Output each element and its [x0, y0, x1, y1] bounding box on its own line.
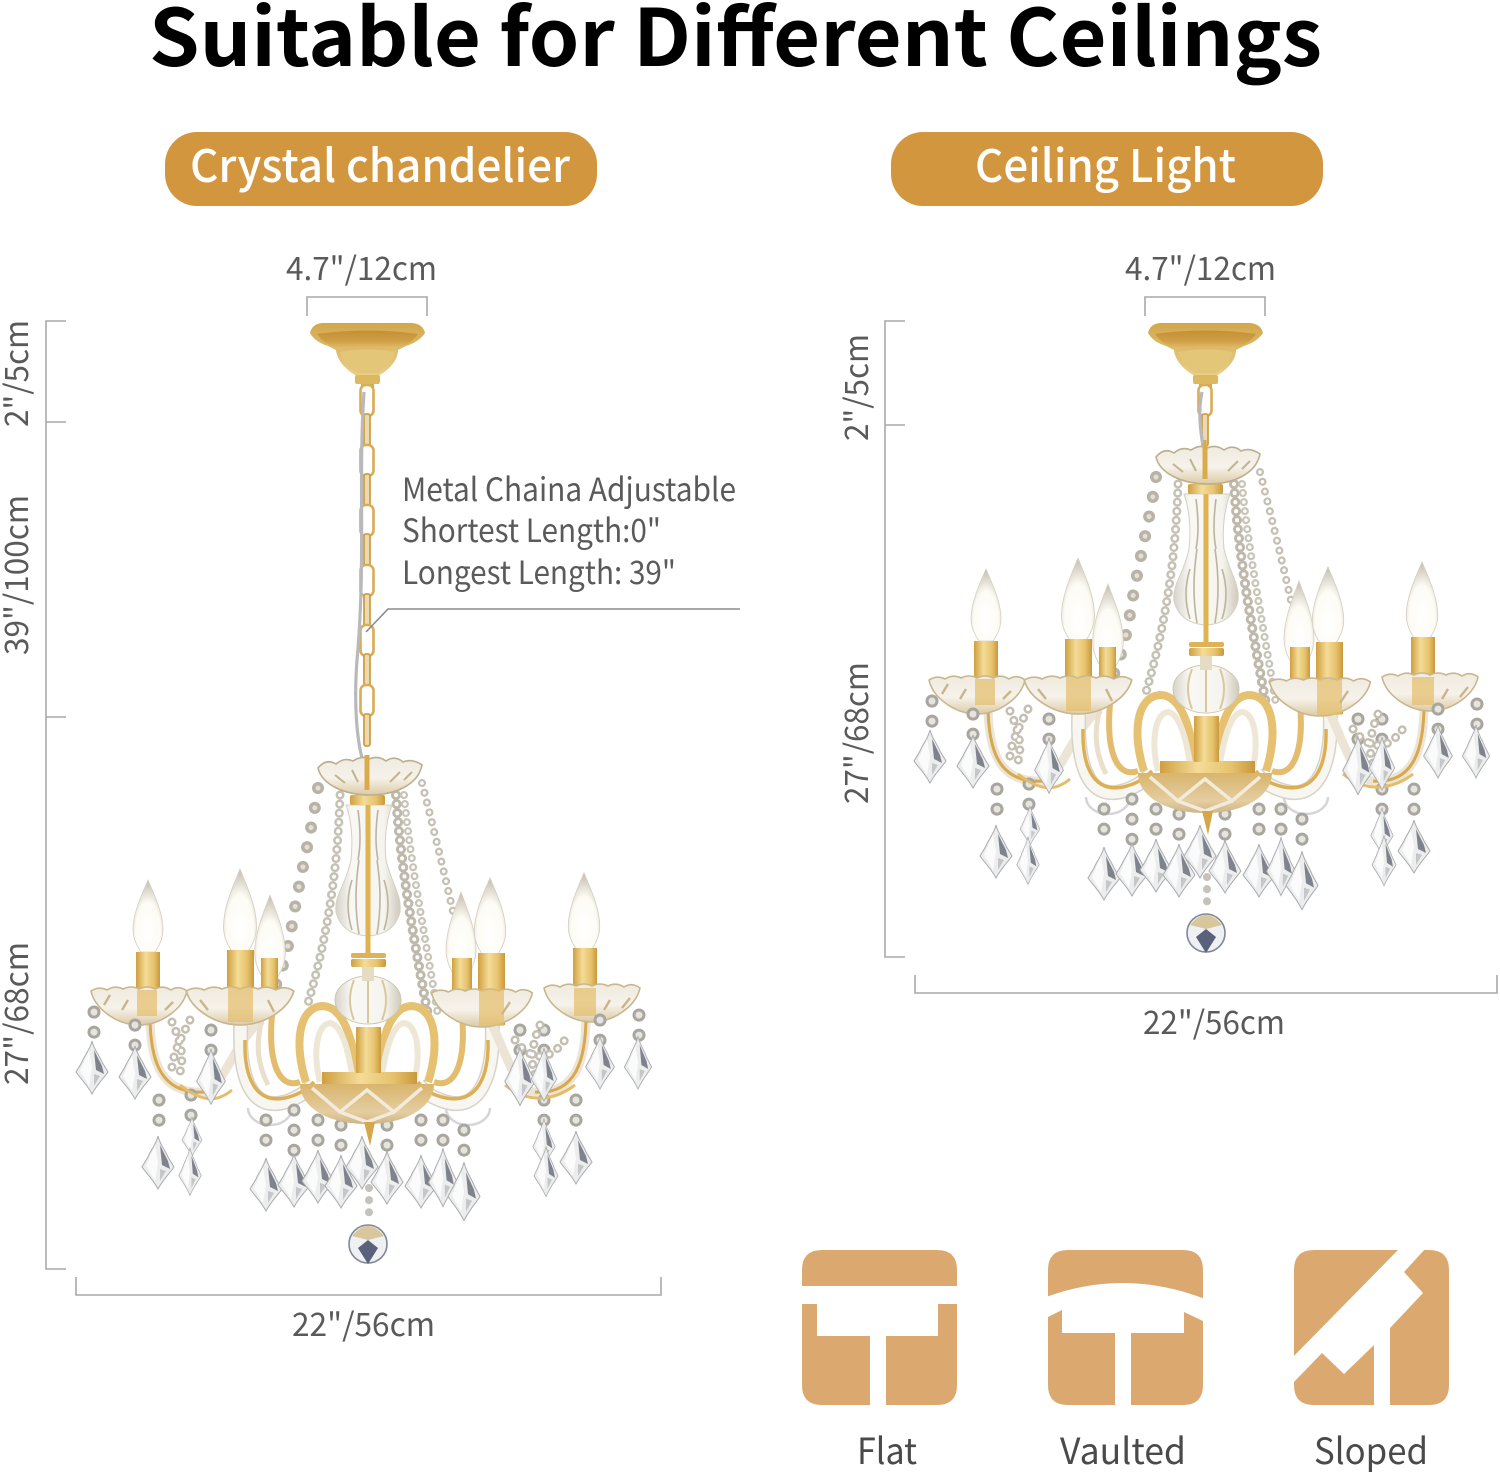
chandelier body [914, 444, 1490, 953]
icon: ceiling canopy [310, 323, 425, 392]
panel: crystal chandelier heading pill: Crystal chandelier [190, 130, 571, 195]
icon: flat ceiling [800, 1250, 959, 1407]
callout: chain length text: Shortest Length:0" [402, 506, 661, 552]
label: Flat: Flat [857, 1423, 917, 1475]
canopy width bracket [307, 297, 427, 316]
chandelier body [76, 755, 652, 1264]
width bracket [915, 975, 1497, 993]
width label: 22"/56cm [292, 1300, 435, 1346]
callout: chain length text: Longest Length: 39" [402, 548, 676, 594]
chain with wire [356, 385, 374, 765]
callout: chain length text: Metal Chaina Adjustable [402, 465, 736, 511]
callout leader line [366, 609, 740, 632]
callout: chain length text [402, 465, 736, 594]
label: Sloped: Sloped [1314, 1423, 1428, 1475]
vertical dimension axis [46, 321, 66, 1269]
label: Vaulted: Vaulted [1060, 1423, 1186, 1475]
height label: canopy: 2"/5cm [832, 334, 878, 441]
canopy width label: 4.7"/12cm [1125, 244, 1276, 290]
panel: crystal chandelier dimension diagram [0, 244, 740, 1346]
canopy width bracket [1145, 297, 1265, 316]
width bracket [76, 1277, 661, 1295]
width label: 22"/56cm [1143, 998, 1285, 1044]
icon: ceiling canopy [1148, 323, 1263, 392]
short chain [1198, 385, 1212, 455]
icon: sloped ceiling [1292, 1248, 1449, 1407]
canopy width label: 4.7"/12cm [286, 244, 437, 290]
vertical dimension axis [885, 321, 905, 957]
panel: ceiling light dimension diagram [832, 244, 1497, 1044]
panel: ceiling light heading pill [891, 130, 1323, 206]
icon: vaulted ceiling [1046, 1250, 1205, 1407]
height label: body: 27"/68cm [832, 662, 878, 804]
panel: ceiling light heading pill: Ceiling Light [975, 130, 1236, 195]
